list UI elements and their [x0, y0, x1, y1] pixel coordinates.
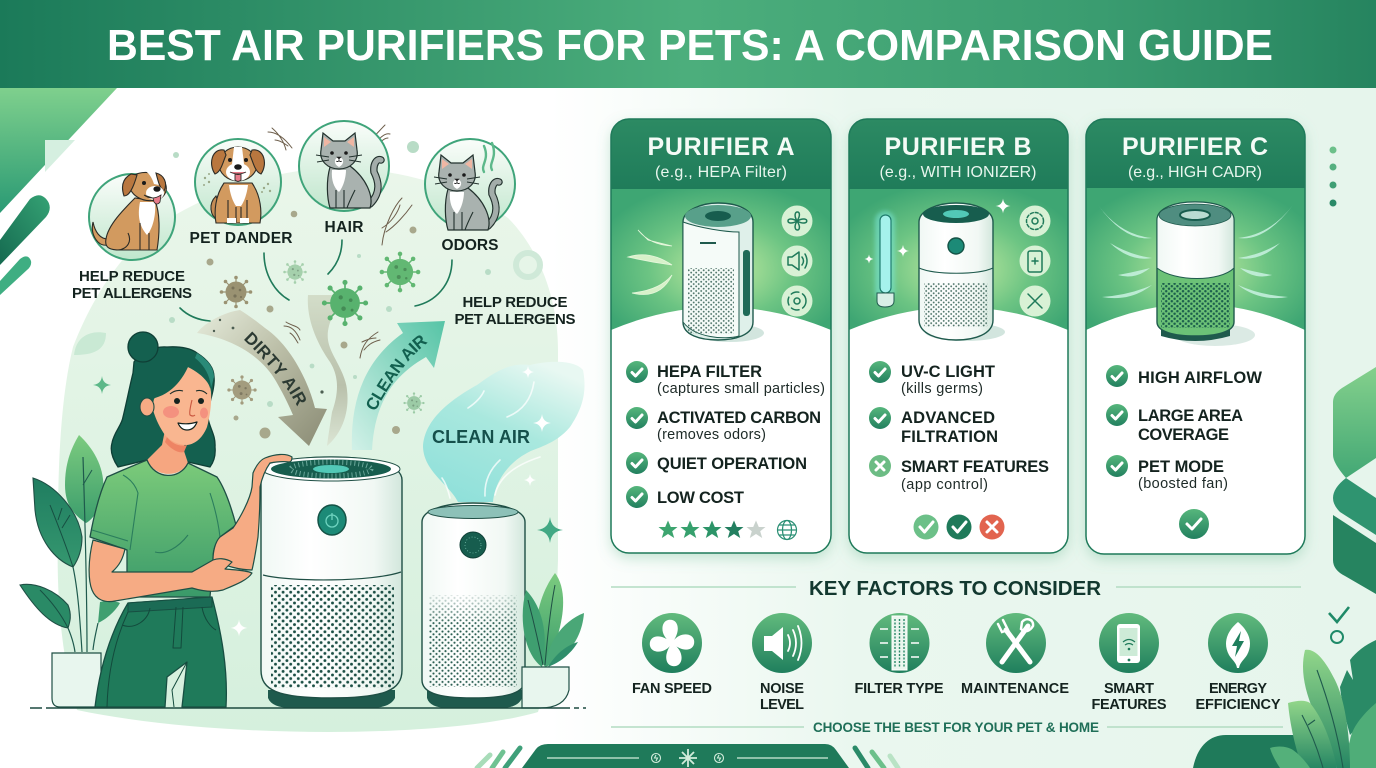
virus particles	[220, 252, 425, 414]
factor: filter type: FILTER TYPE	[854, 681, 944, 697]
factor: energy efficiency: EFFICIENCY	[1196, 697, 1281, 713]
icon: leaf with bolt	[1226, 622, 1250, 668]
arrow label: clean air: CLEAN AIR	[366, 335, 428, 410]
icon: gray cat	[316, 133, 381, 208]
feature: advanced filtration: ADVANCED	[901, 409, 995, 427]
woman illustration	[89, 332, 292, 707]
factor: fan speed: FAN SPEED	[632, 681, 712, 697]
dander specks	[203, 173, 271, 193]
factor: noise level	[752, 613, 812, 713]
feature icon: spiral	[782, 286, 812, 316]
icon: speaker	[764, 627, 783, 660]
ear	[140, 398, 154, 416]
label: help reduce pet allergens: PET ALLERGENS	[72, 285, 192, 302]
label: help reduce pet allergens right: PET ALLERGENS	[454, 311, 576, 328]
dial	[460, 532, 486, 558]
feature: activated carbon: ACTIVATED CARBON	[657, 409, 821, 427]
header banner	[0, 0, 1376, 88]
feature: smart features: SMART FEATURES	[901, 458, 1049, 476]
feature icon: cross	[1020, 286, 1050, 316]
factor: noise level: NOISE	[760, 681, 804, 697]
heading: PURIFIER C	[1122, 133, 1268, 161]
feature list	[626, 361, 825, 508]
hair bun	[128, 332, 158, 362]
feature: large area coverage	[1106, 404, 1243, 444]
pet circle: cat, odors	[425, 139, 515, 254]
feature: advanced filtration: FILTRATION	[901, 428, 998, 446]
connector curves	[180, 240, 452, 321]
feature: pet mode: (boosted fan)	[1138, 476, 1228, 492]
purifier illustration	[683, 203, 764, 342]
feature: large area coverage: COVERAGE	[1138, 426, 1229, 444]
bottom-right corner plant	[1193, 607, 1376, 768]
floating particles	[169, 125, 491, 438]
label: clean air: CLEAN AIR	[432, 427, 530, 447]
icon: tools	[998, 619, 1033, 662]
small air purifier	[422, 503, 525, 708]
decorative right hexagons	[1333, 367, 1376, 594]
top-left decorative shapes	[0, 88, 117, 295]
footer icons	[652, 749, 724, 767]
pants	[95, 597, 226, 707]
feature: activated carbon	[626, 407, 821, 443]
plume: clean air from small purifier	[423, 362, 585, 502]
panel: purifier C	[1086, 119, 1305, 554]
subheading: (e.g., HIGH CADR)	[1128, 164, 1262, 181]
factor: fan speed	[632, 613, 712, 697]
subheading: (e.g., WITH IONIZER)	[880, 164, 1036, 181]
factor: smart features: SMART	[1104, 681, 1154, 697]
panel: purifier A	[611, 119, 831, 553]
feature: high airflow: HIGH AIRFLOW	[1138, 369, 1262, 387]
factor: smart features: FEATURES	[1092, 697, 1167, 713]
pet hair strands	[268, 125, 412, 358]
left arm and hand	[89, 540, 252, 602]
feature list	[869, 361, 1049, 493]
large air purifier	[261, 457, 402, 708]
feature: large area coverage: LARGE AREA	[1138, 407, 1243, 425]
purifier illustration	[919, 203, 1005, 341]
heading: PURIFIER B	[884, 133, 1032, 161]
face	[153, 367, 211, 445]
shirt	[90, 460, 236, 597]
neck	[147, 430, 188, 474]
icon: check and ring	[1329, 607, 1349, 643]
purifier illustration	[1157, 202, 1255, 346]
arrow label: dirty air: DIRTY AIR	[244, 332, 306, 406]
panel: purifier B	[849, 119, 1068, 553]
feature: hepa filter	[626, 361, 825, 397]
icon: fan	[650, 620, 694, 666]
icon: front dog	[211, 147, 264, 223]
facial features	[163, 390, 208, 430]
hair fringe	[148, 350, 212, 400]
status icon: check	[1179, 509, 1209, 539]
factor: maintenance	[961, 613, 1069, 697]
feature: high airflow	[1106, 365, 1262, 387]
ground line	[30, 707, 586, 709]
feature icon: phone	[1020, 246, 1050, 276]
label: odors: ODORS	[442, 237, 498, 254]
icon: odor waves	[483, 143, 494, 172]
factor: energy efficiency: ENERGY	[1209, 681, 1267, 697]
hair back	[111, 347, 215, 467]
factor: noise level: LEVEL	[760, 697, 804, 713]
decorative dots	[1330, 146, 1336, 206]
air swirl lines	[628, 230, 672, 295]
tagline: CHOOSE THE BEST FOR YOUR PET & HOME	[813, 720, 1099, 735]
dotted grille	[271, 585, 394, 688]
feature: hepa filter: (captures small particles)	[657, 381, 825, 397]
vent top	[262, 457, 400, 481]
feature icon: speaker	[782, 246, 812, 276]
icon: globe	[778, 520, 796, 540]
label: hair: HAIR	[324, 219, 364, 236]
feature: low cost: LOW COST	[657, 489, 744, 507]
swirl of dirty air	[308, 295, 348, 446]
icon: plant pot	[52, 653, 101, 707]
icon: plant pot	[522, 667, 569, 708]
decorative pale leaf and ring	[74, 253, 540, 355]
feature: advanced filtration	[869, 407, 998, 446]
bottom footer band	[477, 744, 898, 768]
label: help reduce pet allergens: HELP REDUCE	[79, 268, 185, 285]
subheading: (e.g., HEPA Filter)	[655, 164, 787, 181]
pet circle: dog with label	[72, 170, 192, 302]
feature: quiet operation	[626, 452, 807, 474]
icon: filter	[880, 616, 919, 670]
left illustration background blob	[58, 168, 558, 732]
status icons	[914, 514, 1004, 540]
icon: brown dog	[92, 170, 166, 250]
feature: uv-c light: (kills germs)	[901, 381, 983, 397]
power button	[318, 505, 346, 535]
factor: energy efficiency	[1196, 613, 1281, 713]
feature: quiet operation: QUIET OPERATION	[657, 455, 807, 473]
icon: UV-C lamp	[864, 211, 909, 307]
feature: smart features: (app control)	[901, 477, 988, 493]
arrow: dirty air	[197, 310, 327, 446]
title: BEST AIR PURIFIERS FOR PETS: A COMPARISON GUIDE	[107, 21, 1273, 70]
feature: activated carbon: (removes odors)	[657, 427, 766, 443]
airflow streams	[1098, 205, 1293, 298]
plant: left	[20, 435, 120, 707]
feature: smart features	[869, 455, 1049, 493]
feature: low cost	[626, 486, 744, 508]
feature: pet mode: PET MODE	[1138, 458, 1224, 476]
feature: uv-c light: UV-C LIGHT	[901, 363, 995, 381]
factor: filter type	[854, 613, 944, 697]
right arm	[213, 454, 292, 570]
label: pet dander: PET DANDER	[190, 230, 292, 247]
feature: hepa filter: HEPA FILTER	[657, 363, 762, 381]
pet circle: dog, pet dander	[190, 139, 292, 247]
sparkles	[93, 366, 563, 636]
pet circle: cat, hair	[299, 121, 389, 236]
plant: right	[522, 573, 584, 708]
feature icon: flower	[782, 206, 812, 236]
feature: pet mode	[1106, 455, 1228, 492]
star rating	[658, 520, 766, 538]
heading: key factors to consider: KEY FACTORS TO CONSIDER	[809, 577, 1101, 600]
label: help reduce pet allergens right: HELP REDUCE	[462, 294, 568, 311]
dotted grille	[429, 595, 517, 687]
feature list	[1106, 365, 1262, 492]
factor: maintenance: MAINTENANCE	[961, 681, 1069, 697]
feature: uv-c light	[869, 361, 995, 397]
feature icon: gear	[1020, 206, 1050, 236]
factor: smart features	[1092, 613, 1167, 713]
arrow: clean air	[352, 321, 445, 450]
icon: smartphone	[1117, 624, 1140, 663]
icon: gray cat with odor	[434, 155, 499, 230]
heading: PURIFIER A	[648, 133, 794, 161]
